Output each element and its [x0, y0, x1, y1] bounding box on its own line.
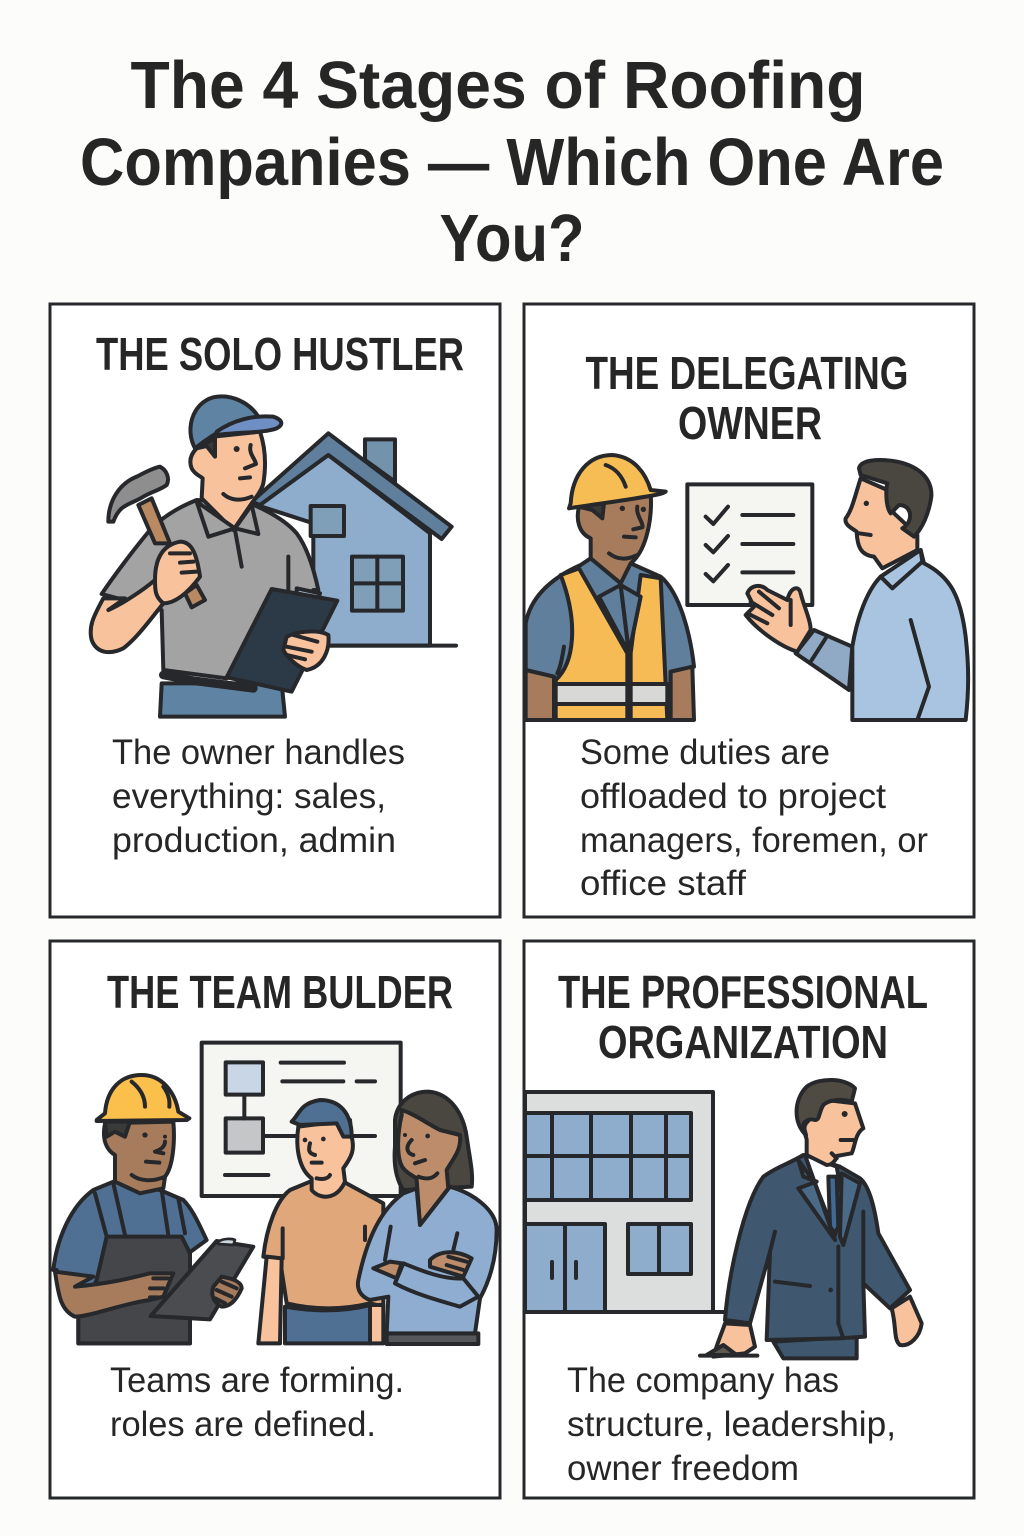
title: Companies — Which One Are — [80, 125, 944, 200]
text: professional organization description: The company has — [567, 1361, 839, 1400]
heading: the professional organization: ORGANIZATION — [598, 1016, 888, 1068]
icon: house — [252, 433, 456, 646]
text: team builder description: roles are defined. — [110, 1405, 376, 1444]
title — [80, 48, 944, 276]
text: professional organization description: structure, leadership, — [567, 1405, 896, 1444]
panel: the team builder — [50, 941, 500, 1498]
icon: foreman in safety vest — [526, 455, 694, 720]
heading: the solo hustler: THE SOLO HUSTLER — [96, 328, 464, 380]
title: The 4 Stages of Roofing — [130, 48, 866, 123]
text: team builder description — [110, 1361, 404, 1444]
text: solo hustler description: The owner handles — [112, 733, 405, 772]
text: delegating owner description: office staff — [580, 864, 746, 903]
text: professional organization description — [567, 1361, 896, 1488]
heading: the team bulder: THE TEAM BULDER — [107, 966, 453, 1018]
title: You? — [440, 201, 584, 276]
text: delegating owner description: offloaded to project — [580, 777, 886, 816]
icon: worker with clipboard — [53, 1075, 253, 1343]
heading: the professional organization — [558, 966, 928, 1068]
text: delegating owner description — [580, 733, 928, 903]
heading: the delegating owner: OWNER — [678, 397, 822, 449]
text: solo hustler description: everything: sales, — [112, 777, 386, 816]
icon: owner in blue shirt — [746, 460, 968, 720]
panel: the solo hustler — [50, 304, 500, 917]
heading: the delegating owner — [586, 347, 908, 449]
text: delegating owner description: managers, foremen, or — [580, 821, 928, 860]
text: delegating owner description: Some duties are — [580, 733, 830, 772]
heading: the professional organization: THE PROFESSIONAL — [558, 966, 928, 1018]
icon: checklist — [687, 484, 812, 605]
icon: woman with crossed arms — [358, 1092, 497, 1344]
icon: solo roofer with hammer and clipboard — [91, 396, 337, 717]
panel: the professional organization — [524, 941, 974, 1498]
icon: young worker — [258, 1100, 383, 1343]
text: team builder description: Teams are forming. — [110, 1361, 404, 1400]
icon: businessman in suit — [700, 1080, 922, 1358]
text: solo hustler description: production, admin — [112, 821, 396, 860]
text: solo hustler description — [112, 733, 405, 860]
text: professional organization description: owner freedom — [567, 1449, 799, 1488]
icon: office building — [525, 1092, 726, 1312]
panel: the delegating owner — [524, 304, 974, 917]
heading: the delegating owner: THE DELEGATING — [586, 347, 908, 399]
icon: org chart board — [202, 1043, 401, 1196]
